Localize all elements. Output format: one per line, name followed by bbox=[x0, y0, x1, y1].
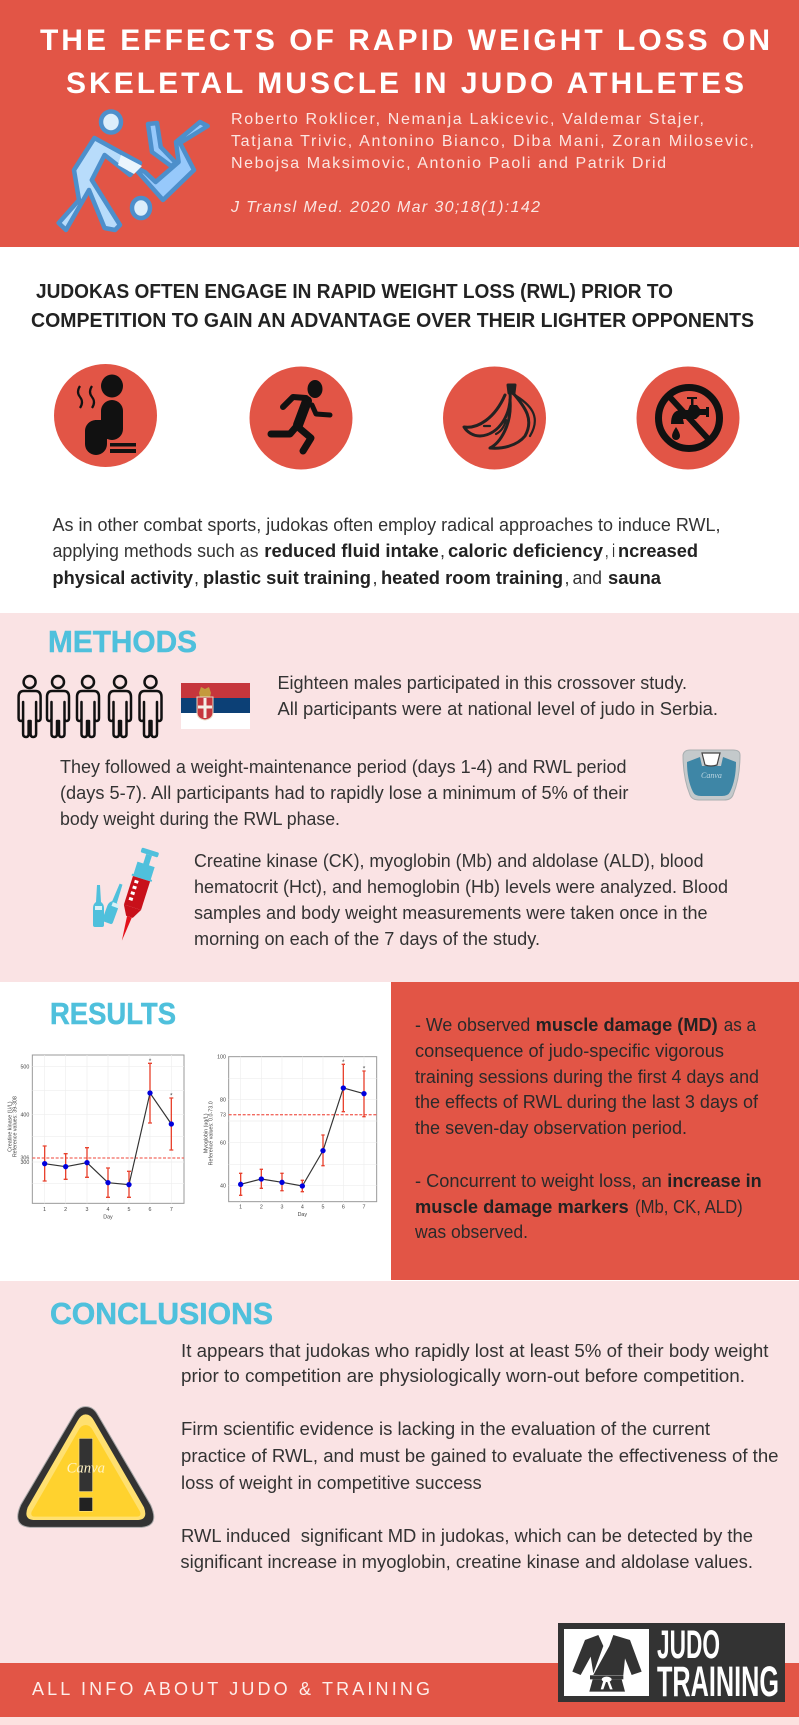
text block: RWL methods bbox=[52, 515, 720, 588]
text block: worn-out: It appears that judokas who rapidly lost at least 5% of their body weight bbox=[181, 1341, 768, 1361]
icon: bananas bbox=[443, 366, 546, 470]
icon: warning triangle: Canva bbox=[67, 1460, 105, 1476]
text block: RWL methods: , i bbox=[605, 541, 615, 561]
text block: RWL methods: and bbox=[572, 568, 602, 588]
chart: myoglobin: 40 bbox=[220, 1184, 226, 1190]
logo: judo training bbox=[558, 1623, 785, 1706]
text block: significant damage: significant increase in myoglobin, creatine kinase and aldolase values. bbox=[180, 1552, 753, 1572]
chart: creatine kinase: 1 bbox=[43, 1207, 46, 1213]
chart: creatine kinase bbox=[7, 1055, 184, 1221]
chart: myoglobin: 73 bbox=[220, 1113, 226, 1119]
icon: weighing scale: Canva bbox=[701, 771, 722, 780]
title: SKELETAL MUSCLE IN JUDO ATHLETES bbox=[66, 67, 744, 100]
icon: five participants bbox=[19, 676, 161, 737]
text block: muscle damage: as a bbox=[724, 1015, 757, 1035]
text block: muscle damage: consequence of judo-specific vigorous bbox=[415, 1041, 724, 1061]
heading: rapid weight loss bbox=[31, 281, 754, 332]
panel: footer bbox=[0, 1623, 799, 1725]
logo wordmark bbox=[657, 1623, 779, 1706]
icon: no water tap bbox=[636, 366, 740, 470]
text block: damage markers: muscle damage markers bbox=[415, 1197, 629, 1217]
icon: Serbian flag bbox=[181, 683, 250, 729]
icon: syringe and ampoules bbox=[93, 847, 161, 944]
chart: creatine kinase: 306 bbox=[20, 1156, 29, 1162]
chart: myoglobin: Myoglobin (ug/L) bbox=[203, 1113, 209, 1153]
chart: myoglobin: 5 bbox=[322, 1205, 325, 1211]
chart: myoglobin: Day bbox=[298, 1212, 307, 1218]
text block: damage markers: (Mb, CK, ALD) bbox=[635, 1197, 743, 1217]
text block: RWL methods: , bbox=[440, 541, 445, 561]
footer tagline: ALL INFO ABOUT JUDO & TRAINING bbox=[32, 1679, 430, 1699]
text block: RWL methods: reduced fluid intake bbox=[264, 541, 439, 561]
text block: RWL methods: ncreased bbox=[618, 541, 698, 561]
chart: myoglobin: * bbox=[363, 1066, 366, 1073]
authors: Nebojsa Maksimovic, Antonio Paoli and Patrik Drid bbox=[231, 155, 666, 172]
text block: RWL methods: As in other combat sports, judokas often employ radical approaches to induce RWL, bbox=[52, 515, 720, 535]
text block: muscle damage: - We observed bbox=[415, 1015, 530, 1035]
authors: Roberto Roklicer, Nemanja Lakicevic, Valdemar Stajer, bbox=[231, 111, 704, 128]
text block: RWL methods: physical activity bbox=[52, 568, 193, 588]
text block: damage markers: increase in bbox=[667, 1171, 762, 1191]
text block: participants: All participants were at national level of judo in Serbia. bbox=[278, 699, 718, 719]
chart: creatine kinase: Reference values: 39-308 bbox=[13, 1096, 19, 1157]
text block: damage markers: - Concurrent to weight loss, an bbox=[415, 1171, 662, 1191]
chart: creatine kinase: 500 bbox=[20, 1065, 29, 1071]
icon: sauna bbox=[54, 364, 157, 467]
text block: RWL methods: , bbox=[372, 568, 378, 588]
text block: measurements: morning on each of the 7 days of the study. bbox=[194, 929, 540, 949]
text block: evidence lacking bbox=[181, 1419, 778, 1493]
chart: creatine kinase: 6 bbox=[149, 1207, 152, 1213]
title: THE EFFECTS OF RAPID WEIGHT LOSS ON bbox=[40, 24, 770, 57]
chart: creatine kinase: 5 bbox=[128, 1207, 131, 1213]
authors bbox=[231, 111, 754, 172]
chart: creatine kinase: Creatine kinase (U/L) bbox=[7, 1101, 13, 1152]
text block: RWL methods: sauna bbox=[608, 568, 662, 588]
text block: muscle damage: the effects of RWL during the last 3 days of bbox=[415, 1092, 759, 1112]
chart: myoglobin: 6 bbox=[342, 1205, 345, 1211]
text block: protocol: body weight during the RWL phase. bbox=[60, 809, 340, 829]
text block: participants: Eighteen males participated in this crossover study. bbox=[278, 673, 687, 693]
heading: results: RESULTS bbox=[50, 996, 176, 1031]
chart: myoglobin: Reference values: 0.0-73.0 bbox=[209, 1101, 215, 1165]
chart: creatine kinase: 4 bbox=[107, 1207, 110, 1213]
title bbox=[40, 24, 770, 100]
text block: muscle damage bbox=[415, 1015, 759, 1138]
heading: rapid weight loss: JUDOKAS OFTEN ENGAGE IN RAPID WEIGHT LOSS (RWL) PRIOR TO bbox=[36, 281, 673, 303]
chart: myoglobin: 60 bbox=[220, 1141, 226, 1147]
chart: creatine kinase: 400 bbox=[20, 1112, 29, 1118]
text block: protocol: (days 5-7). All participants had to rapidly lose a minimum of 5% of their bbox=[60, 783, 628, 803]
chart: creatine kinase: 2 bbox=[64, 1207, 67, 1213]
text block: measurements: samples and body weight measurements were taken once in the bbox=[194, 903, 708, 923]
chart: myoglobin bbox=[203, 1055, 377, 1218]
chart: creatine kinase: * bbox=[170, 1093, 173, 1100]
authors: Tatjana Trivic, Antonino Bianco, Diba Mani, Zoran Milosevic, bbox=[231, 133, 754, 150]
chart: creatine kinase: 7 bbox=[170, 1207, 173, 1213]
text block: RWL methods: heated room training bbox=[381, 568, 563, 588]
chart: myoglobin: 80 bbox=[220, 1097, 226, 1103]
text block: RWL methods: plastic suit training bbox=[203, 568, 371, 588]
text block: measurements: Creatine kinase (CK), myoglobin (Mb) and aldolase (ALD), blood bbox=[194, 851, 704, 871]
text block: muscle damage: muscle damage (MD) bbox=[536, 1015, 718, 1035]
icon: runner bbox=[250, 366, 352, 470]
text block: evidence lacking: practice of RWL, and must be gained to evaluate the effectiveness of the bbox=[181, 1446, 778, 1466]
text block: RWL methods: applying methods such as bbox=[52, 541, 258, 561]
heading: methods: METHODS bbox=[48, 624, 197, 659]
chart: creatine kinase: 3 bbox=[86, 1207, 89, 1213]
icon: weighing scale bbox=[683, 750, 740, 800]
text block: RWL methods: , bbox=[194, 568, 199, 588]
text block: muscle damage: training sessions during the first 4 days and bbox=[415, 1067, 759, 1087]
text block: damage markers: was observed. bbox=[414, 1222, 528, 1242]
text block: protocol bbox=[60, 757, 628, 829]
panel: header bbox=[0, 0, 799, 247]
text block: damage markers bbox=[414, 1171, 762, 1242]
text block: measurements: hematocrit (Hct), and hemoglobin (Hb) levels were analyzed. Blood bbox=[194, 877, 728, 897]
text block: evidence lacking: Firm scientific evidence is lacking in the evaluation of the current bbox=[181, 1419, 710, 1439]
chart: myoglobin: * bbox=[342, 1059, 345, 1066]
icon: judo throw bbox=[59, 112, 208, 230]
chart: myoglobin: 1 bbox=[239, 1205, 242, 1211]
panel: introduction bbox=[0, 247, 799, 613]
text block: RWL methods: , bbox=[564, 568, 570, 588]
chart: myoglobin: 3 bbox=[281, 1205, 284, 1211]
panel: conclusions bbox=[0, 1281, 799, 1664]
chart: creatine kinase: * bbox=[149, 1058, 152, 1065]
chart: myoglobin: 7 bbox=[363, 1205, 366, 1211]
icon: judo gi bbox=[572, 1635, 642, 1692]
icon: warning triangle bbox=[18, 1407, 154, 1527]
heading: conclusions: CONCLUSIONS bbox=[50, 1296, 273, 1331]
chart: creatine kinase: 300 bbox=[20, 1160, 29, 1166]
text block: RWL methods: caloric deficiency bbox=[448, 541, 603, 561]
panel: methods bbox=[0, 613, 799, 982]
text block: significant damage: RWL induced significant MD in judokas, which can be detected by the bbox=[181, 1526, 753, 1546]
text block: protocol: They followed a weight-maintenance period (days 1-4) and RWL period bbox=[60, 757, 626, 777]
text block: muscle damage: the seven-day observation period. bbox=[415, 1118, 687, 1138]
panel: results text bbox=[391, 982, 799, 1280]
logo wordmark: JUDO bbox=[657, 1623, 720, 1667]
text block: worn-out: prior to competition are physiologically worn-out before competition. bbox=[181, 1366, 745, 1386]
text block: evidence lacking: loss of weight in competitive success bbox=[181, 1473, 482, 1493]
chart: myoglobin: 2 bbox=[260, 1205, 263, 1211]
text block: worn-out bbox=[181, 1341, 768, 1386]
heading: rapid weight loss: COMPETITION TO GAIN AN ADVANTAGE OVER THEIR LIGHTER OPPONENTS bbox=[31, 310, 754, 332]
panel: results charts bbox=[0, 982, 391, 1281]
chart: creatine kinase: Day bbox=[103, 1215, 113, 1221]
text block: significant damage bbox=[180, 1526, 753, 1572]
chart: myoglobin: 100 bbox=[217, 1055, 226, 1061]
citation: J Transl Med. 2020 Mar 30;18(1):142 bbox=[230, 199, 540, 216]
text block: measurements bbox=[194, 851, 728, 949]
text block: participants bbox=[278, 673, 718, 719]
chart: myoglobin: 4 bbox=[301, 1205, 304, 1211]
